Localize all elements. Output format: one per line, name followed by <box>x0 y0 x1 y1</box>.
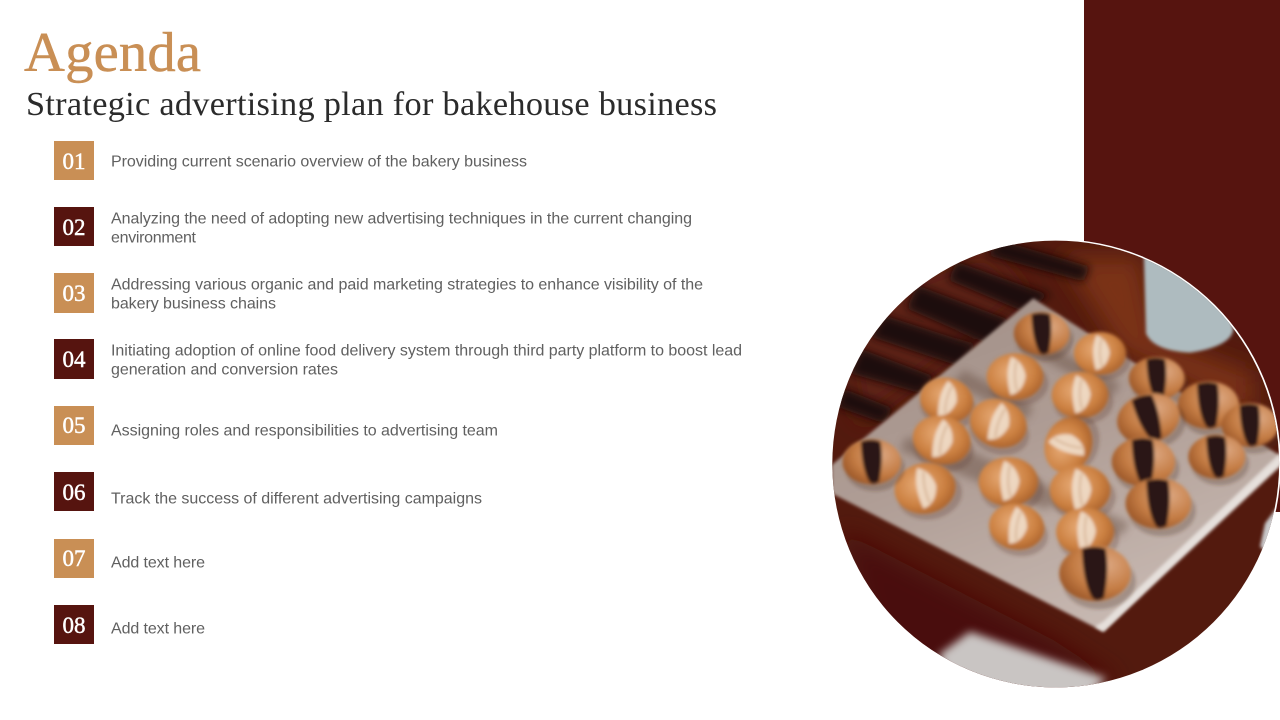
agenda item 04: Initiating adoption of online food delivery system through third party platform to boost lead <box>111 342 742 360</box>
plate <box>832 298 1280 632</box>
agenda item 06 <box>54 472 482 511</box>
agenda item 08 <box>54 605 205 644</box>
agenda item 04: generation and conversion rates <box>111 362 338 378</box>
agenda item 06: Track the success of different advertising campaigns <box>111 490 482 508</box>
table wood tones <box>840 250 1253 683</box>
agenda item 03: 03 <box>62 281 86 306</box>
agenda item 01: Providing current scenario overview of the bakery business <box>111 154 527 170</box>
agenda item 02 <box>54 207 692 246</box>
plate lip <box>1095 452 1280 632</box>
agenda item 06: 06 <box>62 480 86 505</box>
dark plank stripes <box>837 240 1090 423</box>
agenda item 03: Addressing various organic and paid marketing strategies to enhance visibility of the <box>111 276 703 294</box>
agenda item 02: 02 <box>62 215 86 240</box>
plate shadows <box>900 333 1130 537</box>
pastries <box>842 312 1280 609</box>
agenda item 08: 08 <box>62 613 86 638</box>
agenda item 07: Add text here <box>111 554 205 572</box>
agenda item 01: 01 <box>62 149 86 174</box>
photo: bakery pastries on a white plate <box>820 230 1280 700</box>
agenda item 05: 05 <box>62 413 86 438</box>
right dish <box>1258 506 1275 551</box>
agenda item 03 <box>54 273 703 313</box>
subtitle: Strategic advertising plan for bakehouse business <box>26 85 717 123</box>
agenda item 02: Analyzing the need of adopting new advertising techniques in the current changing <box>111 210 692 228</box>
agenda item 05 <box>54 406 498 445</box>
agenda item 07: 07 <box>62 546 86 571</box>
agenda item 07 <box>54 539 205 578</box>
bottom dish <box>938 632 1107 697</box>
agenda item 02: environment <box>111 230 197 246</box>
agenda item 08: Add text here <box>111 620 205 638</box>
agenda item 03: bakery business chains <box>111 296 276 312</box>
agenda item 04: 04 <box>62 347 86 372</box>
agenda item 05: Assigning roles and responsibilities to advertising team <box>111 422 498 440</box>
agenda item 01 <box>54 141 527 180</box>
title: Agenda: Agenda <box>24 22 201 84</box>
agenda item 04 <box>54 339 742 379</box>
mug <box>1142 258 1236 355</box>
panel: maroon accent block <box>1084 0 1280 512</box>
white ring behind photo <box>831 239 1280 689</box>
